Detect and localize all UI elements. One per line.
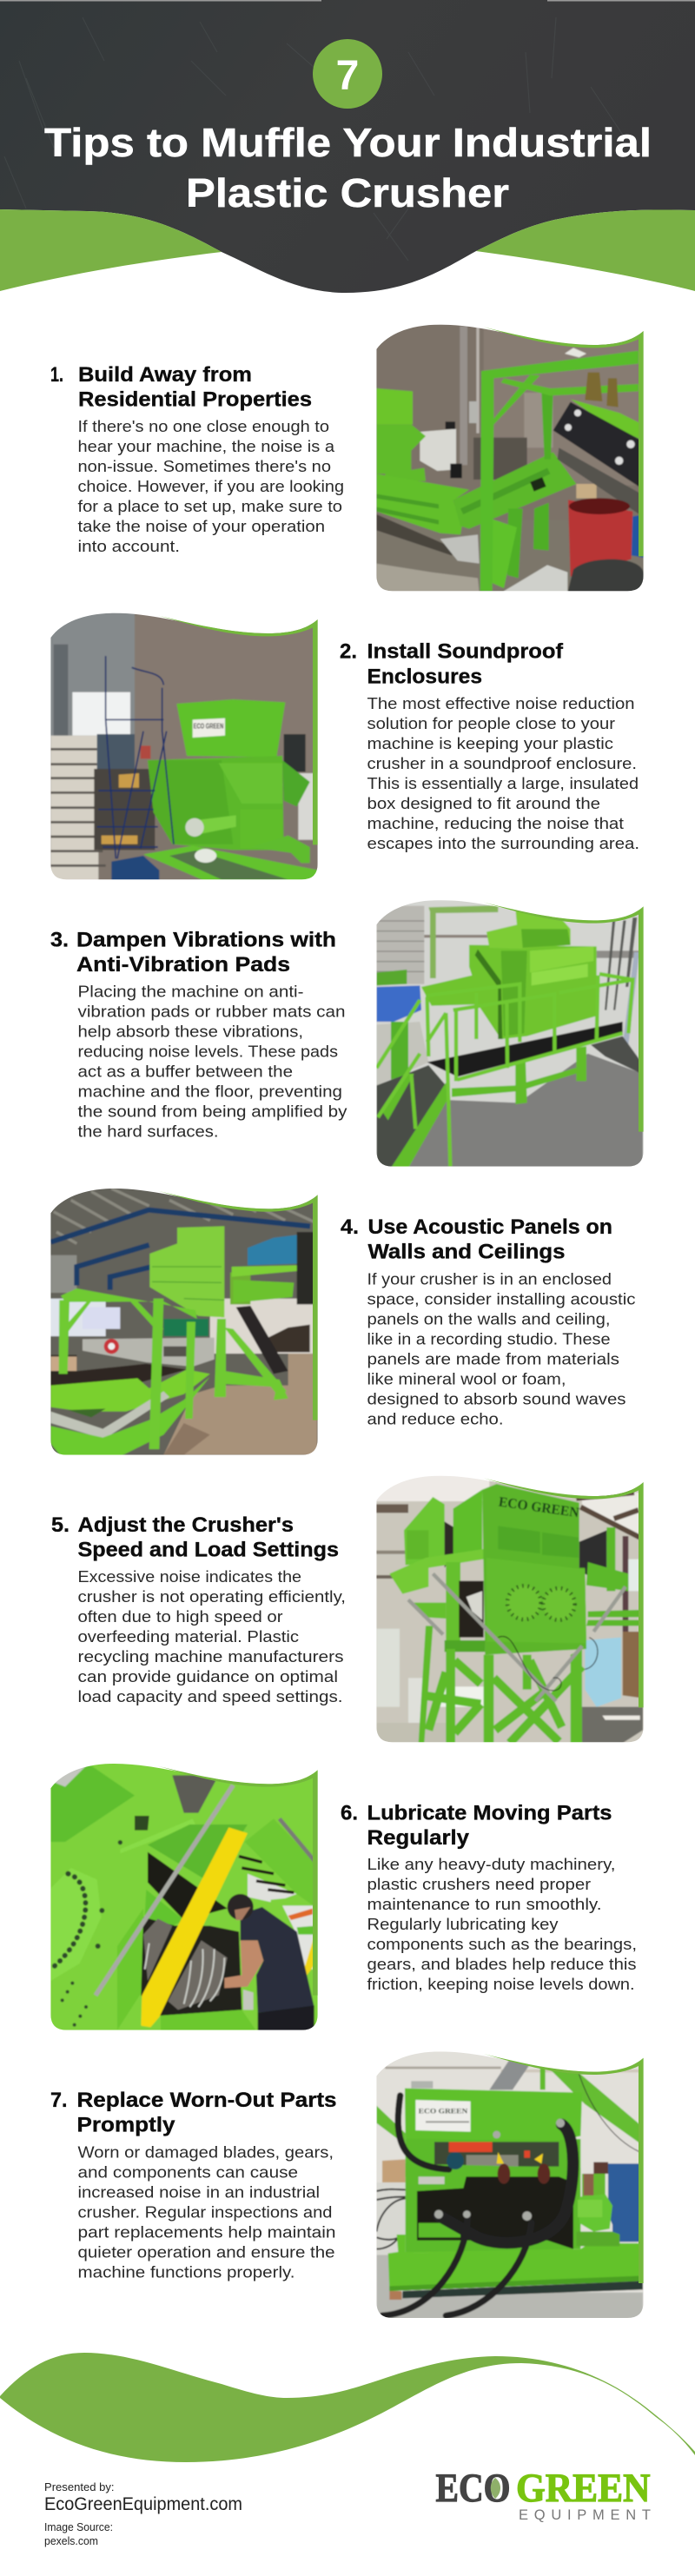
photo: tall Eco Green shredder on braced legs: [374, 1475, 646, 1745]
heading: tip 3: Anti-Vibration Pads: [76, 953, 290, 977]
heading: tip 7: 7.: [50, 2089, 68, 2112]
number badge: 7: 7: [336, 53, 359, 99]
number badge: 7: [313, 39, 382, 109]
heading: tip 6: Regularly: [367, 1826, 470, 1850]
heading: tip 5: 5.: [51, 1513, 70, 1537]
heading: tip 1: [50, 363, 312, 412]
text: tip 7 body: and components can cause: [78, 2163, 298, 2181]
text: tip 2 body: [367, 694, 639, 852]
text: tip 6 body: Regularly lubricating key: [367, 1915, 559, 1933]
photo frame: green wave on tip 4 photo: [158, 1191, 318, 1420]
heading: tip 3: [50, 928, 336, 977]
text: tip 6 body: maintenance to run smoothly.: [367, 1895, 601, 1913]
text: tip 5 body: Excessive noise indicates the: [78, 1567, 301, 1586]
panel: tip 1: [50, 323, 646, 593]
panel: tip 5: [51, 1475, 646, 1745]
footer: presenter and image source: EcoGreenEquipment.com: [44, 2494, 242, 2514]
text: tip 5 body: [78, 1567, 346, 1705]
text: tip 5 body: crusher is not operating efficiently,: [78, 1587, 346, 1606]
title: Tips to Muffle Your Industrial: [44, 120, 652, 165]
photo: hydraulic power unit with hoses: ECO GREEN: [419, 2107, 468, 2116]
text: tip 2 body: crusher in a soundproof enclosure.: [367, 754, 637, 772]
footer green wave: [0, 2353, 695, 2462]
logo: Eco Green Equipment: EQUIPMENT: [519, 2507, 651, 2523]
text: tip 1 body: non-issue. Sometimes there's no: [78, 457, 331, 475]
text: tip 2 body: box designed to fit around the: [367, 794, 600, 812]
text: tip 6 body: friction, keeping noise levels down.: [367, 1975, 634, 1993]
title: Plastic Crusher: [186, 170, 509, 215]
text: tip 7 body: machine functions properly.: [78, 2262, 295, 2281]
footer: presenter and image source: pexels.com: [44, 2534, 98, 2547]
text: tip 5 body: overfeeding material. Plastic: [78, 1627, 299, 1646]
header right green wave: [476, 209, 695, 291]
header left green wave: [0, 209, 222, 291]
text: tip 3 body: reducing noise levels. These pads: [78, 1043, 338, 1060]
text: tip 7 body: Worn or damaged blades, gears,: [78, 2142, 334, 2162]
logo: Eco Green Equipment: GREEN: [516, 2466, 651, 2511]
text: tip 2 body: The most effective noise reduction: [367, 694, 634, 712]
text: tip 1 body: choice. However, if you are looking: [78, 477, 344, 495]
photo frame: green wave on tip 5 photo: [484, 1478, 644, 1707]
heading: tip 1: Residential Properties: [78, 387, 312, 412]
heading: tip 4: Walls and Ceilings: [368, 1241, 565, 1263]
text: tip 1 body: for a place to set up, make sure to: [78, 497, 342, 515]
heading: tip 5: Adjust the Crusher's: [78, 1513, 294, 1537]
text: tip 6 body: gears, and blades help reduce this: [367, 1955, 636, 1973]
text: tip 4 body: like in a recording studio. These: [367, 1329, 610, 1348]
heading: tip 2: Install Soundproof: [367, 639, 564, 664]
photo: tall Eco Green shredder on braced legs: ECO GREEN: [498, 1494, 580, 1520]
text: tip 2 body: escapes into the surrounding area.: [367, 834, 639, 852]
photo frame: green wave on tip 3 photo: [484, 903, 644, 1132]
text: tip 4 body: like mineral wool or foam,: [367, 1369, 566, 1388]
header: dark textured banner: [0, 0, 695, 293]
text: tip 3 body: help absorb these vibrations,: [78, 1022, 303, 1041]
text: tip 1 body: take the noise of your operation: [78, 517, 325, 535]
heading: tip 1: 1.: [50, 363, 63, 387]
logo: Eco Green Equipment: [436, 2466, 651, 2523]
photo: crusher on a railed platform: [374, 900, 646, 1169]
text: tip 3 body: machine and the floor, preventing: [78, 1083, 342, 1100]
text: tip 1 body: [78, 417, 344, 555]
heading: tip 3: 3.: [50, 928, 69, 952]
heading: tip 7: Replace Worn-Out Parts: [76, 2089, 337, 2112]
footer: presenter and image source: Presented by:: [44, 2480, 115, 2493]
heading: tip 5: Speed and Load Settings: [78, 1538, 339, 1562]
text: tip 7 body: increased noise in an industrial: [78, 2182, 320, 2202]
photo: hydraulic power unit with hoses: [374, 2050, 646, 2321]
photo: hopper crusher beside a ladder: ECO GREEN: [194, 722, 223, 730]
text: tip 1 body: hear your machine, the noise is a: [78, 437, 335, 455]
text: tip 3 body: the sound from being amplified by: [78, 1102, 348, 1121]
heading: tip 2: 2.: [340, 639, 357, 664]
panel: tip 2: [48, 610, 639, 882]
text: tip 4 body: designed to absorb sound waves: [367, 1390, 626, 1407]
heading: tip 1: Build Away from: [78, 363, 252, 387]
photo frame: green wave on tip 1 photo: [484, 327, 644, 556]
text: tip 5 body: load capacity and speed settings.: [78, 1687, 342, 1705]
photo: conveyor and crusher in a warehouse: [374, 323, 646, 593]
title: [44, 120, 652, 215]
text: tip 6 body: [367, 1855, 637, 1993]
panel: tip 6: [48, 1761, 637, 2033]
text: tip 3 body: vibration pads or rubber mats can: [78, 1003, 345, 1020]
photo: hopper crusher beside a ladder: [48, 610, 321, 882]
photo: technician servicing shredder blades: [48, 1761, 321, 2033]
heading: tip 6: Lubricate Moving Parts: [367, 1802, 612, 1824]
photo: crusher line in an open shed: [48, 1186, 321, 1458]
text: tip 5 body: can provide guidance on optimal: [78, 1667, 338, 1685]
text: tip 2 body: machine, reducing the noise that: [367, 814, 624, 832]
text: tip 4 body: space, consider installing acoustic: [367, 1289, 636, 1308]
text: tip 3 body: [78, 982, 348, 1140]
text: tip 4 body: If your crusher is in an enclosed: [367, 1270, 612, 1288]
heading: tip 5: [51, 1513, 339, 1562]
heading: tip 7: Promptly: [76, 2113, 175, 2137]
text: tip 2 body: machine is keeping your plastic: [367, 734, 613, 752]
heading: tip 4: 4.: [341, 1215, 359, 1239]
text: tip 5 body: recycling machine manufacturers: [78, 1647, 344, 1665]
text: tip 6 body: Like any heavy-duty machinery,: [367, 1855, 615, 1873]
panel: tip 4: [48, 1186, 636, 1458]
heading: tip 6: [341, 1802, 612, 1850]
text: tip 1 body: If there's no one close enough to: [78, 417, 329, 435]
text: tip 7 body: quieter operation and ensure the: [78, 2243, 335, 2261]
text: tip 4 body: [367, 1270, 636, 1428]
heading: tip 7: [50, 2089, 337, 2137]
text: tip 7 body: crusher. Regular inspections and: [78, 2203, 332, 2221]
heading: tip 3: Dampen Vibrations with: [76, 928, 336, 952]
panel: tip 7: [50, 2050, 646, 2321]
text: tip 2 body: This is essentially a large, insulated: [367, 774, 639, 792]
text: tip 1 body: into account.: [78, 537, 180, 555]
photo frame: green wave on tip 6 photo: [158, 1766, 318, 1996]
text: tip 4 body: panels on the walls and ceiling,: [367, 1310, 610, 1328]
text: tip 4 body: panels are made from materials: [367, 1350, 619, 1367]
text: tip 7 body: [78, 2142, 335, 2281]
panel: tip 3: [50, 900, 646, 1169]
photo frame: green wave on tip 7 photo: [484, 2054, 644, 2283]
text: tip 2 body: solution for people close to your: [367, 714, 615, 732]
heading: tip 6: 6.: [341, 1802, 358, 1824]
logo: Eco Green Equipment: ECO: [436, 2466, 511, 2511]
text: tip 6 body: plastic crushers need proper: [367, 1875, 591, 1893]
text: tip 5 body: often due to high speed or: [78, 1607, 283, 1626]
heading: tip 4: Use Acoustic Panels on: [368, 1215, 612, 1239]
photo frame: green wave on tip 2 photo: [158, 615, 318, 844]
text: tip 4 body: and reduce echo.: [367, 1409, 504, 1428]
heading: tip 2: [340, 639, 564, 688]
text: tip 3 body: Placing the machine on anti-: [78, 982, 304, 1001]
text: tip 3 body: the hard surfaces.: [78, 1122, 219, 1140]
heading: tip 4: [341, 1215, 612, 1263]
footer: presenter and image source: Image Source:: [44, 2520, 113, 2533]
text: tip 7 body: part replacements help maintain: [78, 2222, 335, 2242]
text: tip 6 body: components such as the bearings,: [367, 1935, 637, 1953]
heading: tip 2: Enclosures: [367, 666, 482, 688]
footer: presenter and image source: [44, 2480, 242, 2547]
text: tip 3 body: act as a buffer between the: [78, 1062, 293, 1081]
